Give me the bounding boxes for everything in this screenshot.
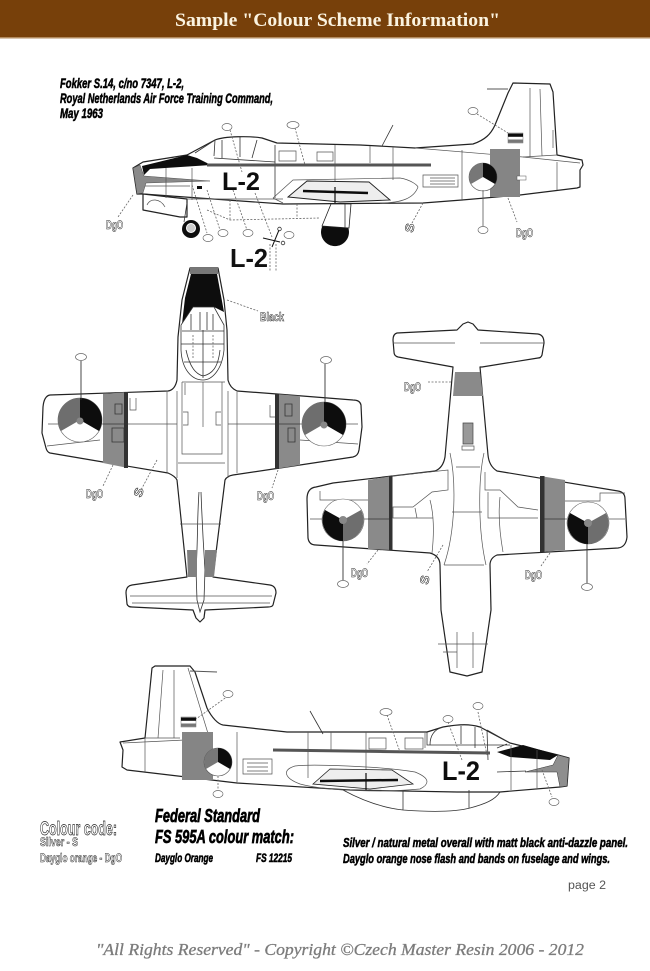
- leader lines and callouts: [118, 108, 517, 242]
- wing root: [273, 178, 418, 203]
- federal standard colour match: Dayglo Orange: [155, 853, 213, 865]
- belly: [343, 790, 500, 811]
- belly dashes: [207, 200, 320, 220]
- upper side view aircraft: [106, 83, 583, 246]
- paint labels: Black: [260, 310, 284, 324]
- wing panel lines: [310, 470, 625, 553]
- paint labels: DgO: [516, 226, 533, 240]
- wing root lines: [393, 343, 544, 668]
- fuselage panels: [177, 382, 228, 478]
- fin details: [523, 88, 557, 157]
- fuselage outline: [133, 83, 583, 204]
- paint labels: S: [417, 574, 433, 586]
- federal standard colour match: [155, 806, 294, 865]
- lower side view aircraft: [120, 666, 569, 811]
- paint labels: DgO: [351, 566, 368, 580]
- paint labels: DgO: [525, 568, 542, 582]
- rear fuselage fin: [130, 492, 272, 612]
- outline: [307, 322, 627, 676]
- black nose panel: [182, 274, 224, 324]
- left roundel: [58, 398, 102, 442]
- fuselage stripe: [207, 164, 431, 166]
- main gear: [321, 204, 351, 246]
- wing root: [286, 765, 427, 791]
- callouts: [338, 382, 592, 590]
- paint labels: DgO: [257, 489, 274, 503]
- roundel: [469, 163, 497, 191]
- header bar: [0, 0, 650, 38]
- title: Sample "Colour Scheme Information": [175, 11, 500, 31]
- paint labels: DgO: [86, 487, 103, 501]
- paint labels: DgO: [106, 218, 123, 232]
- windows: [279, 151, 333, 161]
- black anti-dazzle panel: [142, 155, 211, 175]
- right roundel: [302, 402, 346, 446]
- panel placard: [423, 175, 458, 187]
- small marking: [197, 186, 202, 189]
- canopy: [181, 307, 224, 380]
- separate L-2 decal: L-2: [230, 243, 268, 273]
- fin details: [145, 668, 210, 740]
- placard: [243, 759, 272, 774]
- aircraft caption: Royal Netherlands Air Force Training Command,: [60, 90, 273, 106]
- bottom view aircraft: [307, 322, 627, 676]
- colour code legend: [40, 819, 122, 865]
- right roundel: [567, 502, 609, 544]
- scissors marker: [263, 227, 285, 271]
- roundel: [204, 748, 232, 776]
- orange fuselage band: [490, 149, 520, 197]
- paint labels: S: [131, 486, 147, 499]
- nose orange flash: [133, 165, 210, 194]
- wing section: [288, 181, 390, 202]
- colour code legend: Dayglo orange - DgO: [40, 851, 122, 865]
- canopy frames: [427, 726, 510, 760]
- wing panel lines: [47, 392, 358, 473]
- wing section: [313, 769, 413, 789]
- page number: page 2: [568, 880, 606, 892]
- panel lines: [145, 145, 580, 200]
- fin flash: [508, 133, 523, 143]
- federal standard colour match: FS 12215: [256, 853, 292, 865]
- panel placard: [463, 423, 473, 444]
- orange fuselage band: [182, 732, 213, 780]
- leader lines and callouts: [196, 690, 559, 806]
- right wing band: [275, 394, 300, 469]
- canopy frames: [195, 137, 275, 198]
- nose orange flash: [525, 755, 569, 787]
- nose gear: [182, 203, 200, 238]
- federal standard colour match: Federal Standard: [155, 806, 261, 826]
- colour code legend: Silver - S: [40, 835, 78, 849]
- nose gear bay: [143, 194, 187, 217]
- left wing band: [368, 476, 392, 550]
- nose black panel: [497, 745, 558, 760]
- windows: [369, 738, 423, 749]
- callouts: [76, 300, 332, 490]
- left wing band: [103, 392, 128, 468]
- registration L-2 on fuselage: L-2: [222, 168, 260, 196]
- paint labels: S: [402, 222, 418, 234]
- outline: [42, 268, 362, 622]
- paint labels: DgO: [404, 380, 421, 394]
- fuselage band: [453, 372, 483, 396]
- paint labels: [86, 310, 284, 503]
- paint labels: [351, 380, 542, 586]
- top view aircraft: [42, 268, 362, 622]
- fuselage stripe: [273, 750, 490, 753]
- paint labels: [106, 218, 533, 240]
- outline: [120, 666, 569, 792]
- antenna: [310, 711, 323, 734]
- aircraft caption: Fokker S.14, c/no 7347, L-2,: [60, 75, 184, 91]
- aircraft caption: [60, 75, 273, 121]
- copyright line: "All Rights Reserved" - Copyright ©Czech Master Resin 2006 - 2012: [96, 940, 584, 959]
- registration L-2 on fuselage: L-2: [442, 756, 480, 786]
- left roundel: [322, 499, 364, 541]
- tail bands: [187, 550, 217, 577]
- aircraft caption: May 1963: [60, 105, 103, 121]
- federal standard colour match: FS 595A colour match:: [155, 827, 294, 847]
- panel lines: [123, 732, 537, 790]
- fin flash: [181, 717, 196, 727]
- right wing band: [540, 476, 565, 552]
- scheme description: [343, 835, 628, 866]
- antenna: [382, 125, 393, 146]
- colour code legend: Colour code:: [40, 819, 117, 840]
